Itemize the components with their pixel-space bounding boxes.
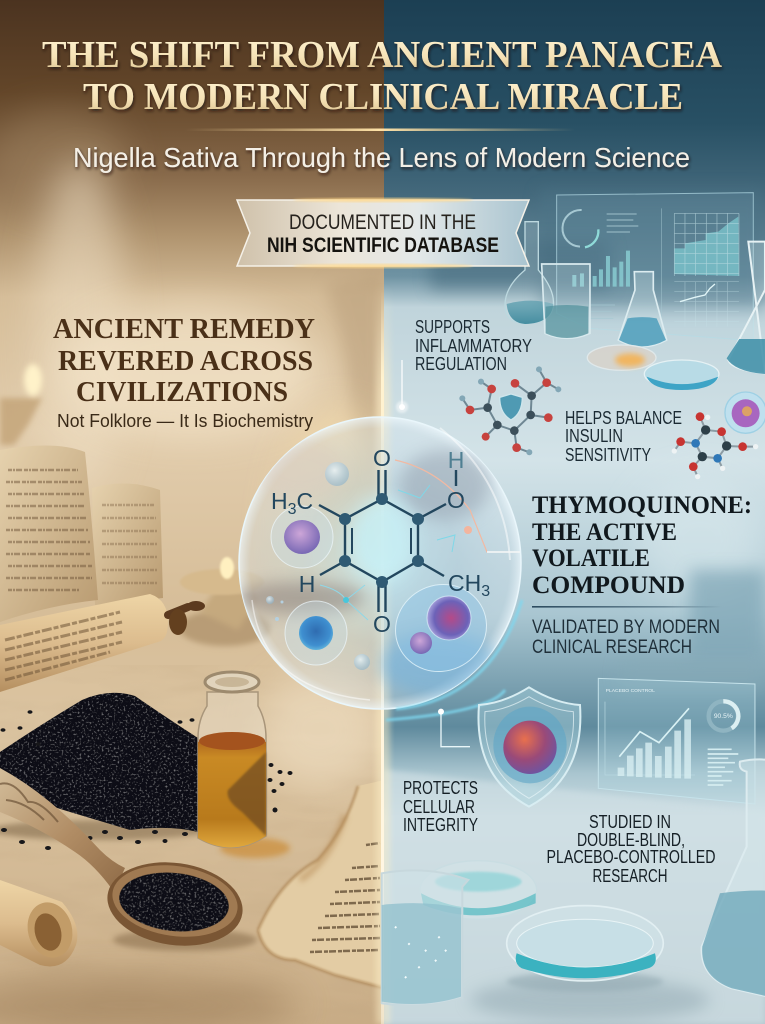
callout: helps balance insulin sensitivity: INSULIN [565,426,623,446]
heading: thymoquinone: VOLATILE [532,545,650,572]
molecule atom labels: O [373,445,391,471]
molecule atom labels: H [448,447,464,473]
lab panel and glassware: upper right [505,193,765,390]
beaker [382,870,468,1006]
flask [702,759,765,997]
title [42,34,723,118]
black seed pile [0,693,292,850]
small scroll: bottom left [0,880,78,966]
molecule atom labels: O [447,487,465,513]
heading: thymoquinone: THE ACTIVE [532,519,677,546]
callout: studied in double-blind research: DOUBLE-BLIND, [577,830,685,850]
molecule atom labels: H [299,571,315,597]
callout: supports inflammatory regulation: REGULATION [415,354,507,374]
molecule structure [319,470,456,612]
sphere interior tones [235,440,500,697]
heading: thymoquinone: COMPOUND [532,572,685,599]
clay tablets [0,445,163,622]
vertical glow divider [376,285,390,1024]
callout: helps balance insulin sensitivity: SENSITIVITY [565,445,651,465]
neural sparks [320,460,520,620]
callout: supports inflammatory regulation: SUPPORTS [415,317,490,337]
chart panel: PLACEBO CONTROL [606,688,655,694]
back petri dish [420,861,537,919]
connector: protects callout [438,709,470,747]
lower lab: shield, chart panel and glassware [382,678,765,1006]
molecule atom labels: O [373,611,391,637]
icon: molecule with cell [672,392,765,479]
candle: upper left [0,364,42,445]
molecule atom labels: C [297,488,313,514]
front petri dish [507,906,663,992]
subheading: validated by research: CLINICAL RESEARCH [532,637,692,658]
cell: lower right [381,570,501,686]
left heading: ancient remedy: ANCIENT REMEDY [53,314,315,345]
cell: lower left [285,601,347,665]
left subheading: Not Folklore — It Is Biochemistry [57,411,313,431]
background: modern laboratory right half [384,0,765,1024]
parchment with script [258,780,384,988]
chart panel: 90.5% [714,713,733,720]
connector: supports callout [396,360,408,413]
subheading: validated by research [532,617,720,658]
callout: protects cellular integrity: INTEGRITY [403,815,478,835]
icon: molecule with shield [459,366,561,455]
callout: studied in double-blind research: STUDIED IN [589,812,671,832]
small bubbles [266,462,370,670]
background: ancient left half [0,0,400,1024]
molecule atom labels: H [271,488,288,514]
banner: DOCUMENTED IN THE [289,211,476,234]
molecule atom labels [271,445,490,637]
callout: helps balance insulin sensitivity [565,408,682,465]
left heading: ancient remedy: CIVILIZATIONS [76,377,288,408]
molecule atom labels: 3 [288,501,297,518]
left heading: ancient remedy [53,314,315,408]
banner [237,198,529,268]
left heading: ancient remedy: REVERED ACROSS [58,346,313,377]
callout: studied in double-blind research: PLACEBO-CONTROLLED [546,847,716,867]
heading: thymoquinone [532,492,752,599]
cell: upper left [271,506,333,568]
bubble with thymoquinone molecule [235,417,522,720]
icon: shielded cell [478,687,580,807]
callout: protects cellular integrity: PROTECTS [403,778,478,798]
callout: helps balance insulin sensitivity: HELPS BALANCE [565,408,682,428]
title: TO MODERN CLINICAL MIRACLE [83,76,683,118]
sphere rim glow [386,600,522,720]
banner: NIH SCIENTIFIC DATABASE [267,234,499,257]
callout: protects cellular integrity [403,778,478,835]
molecule atom labels: CH [448,570,481,596]
wooden spoon with seeds [0,768,257,954]
heading: thymoquinone: THYMOQUINONE: [532,492,752,519]
title: THE SHIFT FROM ANCIENT PANACEA [42,34,723,76]
candle dish: behind scroll [179,557,271,646]
callout: studied in double-blind research [546,812,716,886]
subtitle: Nigella Sativa Through the Lens of Modern Science [73,142,690,173]
molecule atom labels: 3 [481,583,490,600]
callout: studied in double-blind research: RESEARCH [592,866,668,886]
scroll [0,594,205,692]
callout: supports inflammatory regulation [415,317,532,374]
oil bottle [198,672,290,858]
chart panel [598,678,755,804]
subheading: validated by research: VALIDATED BY MODERN [532,617,720,638]
callout: protects cellular integrity: CELLULAR [403,797,475,817]
callout: supports inflammatory regulation: INFLAMMATORY [415,336,532,356]
